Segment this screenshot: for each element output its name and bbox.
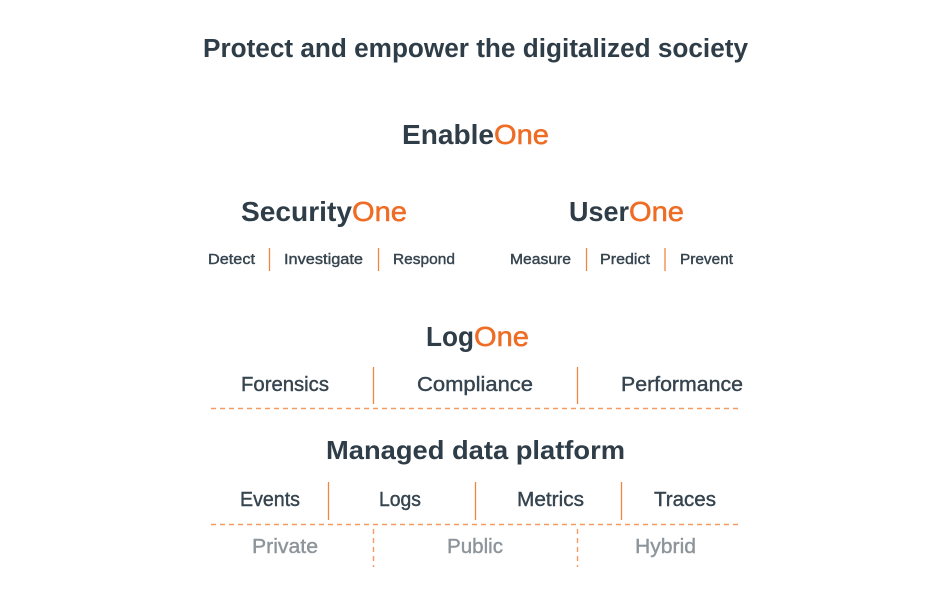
heading: UserOne: [569, 196, 684, 227]
capabilities: Measure, Predict, Prevent: [510, 248, 734, 271]
heading: UserOne: One: [629, 196, 684, 227]
capabilities: Forensics, Compliance, Performance: [241, 367, 743, 404]
title: Protect and empower the digitalized society: [203, 35, 749, 63]
heading: EnableOne: One: [494, 119, 549, 150]
heading: SecurityOne: Security: [241, 196, 352, 227]
capabilities: Measure, Predict, Prevent: Measure: [510, 251, 571, 268]
data types: Events, Logs, Metrics, Traces: Traces: [654, 489, 716, 511]
heading: LogOne: [426, 321, 529, 352]
capabilities: Measure, Predict, Prevent: Predict: [600, 251, 651, 268]
data types: Events, Logs, Metrics, Traces: Events: [240, 489, 300, 511]
heading: SecurityOne: [241, 196, 407, 227]
deployment options: Private, Public, Hybrid: Hybrid: [635, 536, 696, 558]
panel: Managed data platform: [211, 435, 740, 567]
deployment options: Private, Public, Hybrid: Public: [447, 536, 503, 558]
heading: EnableOne: Enable: [402, 119, 494, 150]
capabilities: Detect, Investigate, Respond: Investigate: [284, 251, 363, 268]
capabilities: Forensics, Compliance, Performance: Compliance: [417, 374, 533, 396]
capabilities: Detect, Investigate, Respond: [208, 248, 455, 271]
deployment options: Private, Public, Hybrid: Private: [252, 536, 318, 558]
heading: LogOne: One: [474, 321, 529, 352]
capabilities: Detect, Investigate, Respond: Respond: [393, 251, 455, 268]
capabilities: Detect, Investigate, Respond: Detect: [208, 251, 256, 268]
panel: LogOne: [211, 321, 743, 408]
heading: EnableOne: [402, 119, 549, 150]
heading: UserOne: User: [569, 196, 629, 227]
panel: SecurityOne: [208, 196, 455, 271]
data types: Events, Logs, Metrics, Traces: [240, 482, 716, 520]
data types: Events, Logs, Metrics, Traces: Logs: [379, 489, 421, 511]
capabilities: Forensics, Compliance, Performance: Performance: [621, 374, 743, 396]
heading: LogOne: Log: [426, 321, 474, 352]
capabilities: Forensics, Compliance, Performance: Forensics: [241, 374, 329, 396]
heading: Managed data platform: Managed data platform: [326, 435, 625, 465]
deployment options: Private, Public, Hybrid: [252, 529, 696, 567]
data types: Events, Logs, Metrics, Traces: Metrics: [517, 489, 584, 511]
panel: UserOne: [510, 196, 734, 271]
capabilities: Measure, Predict, Prevent: Prevent: [680, 251, 734, 268]
heading: SecurityOne: One: [352, 196, 407, 227]
